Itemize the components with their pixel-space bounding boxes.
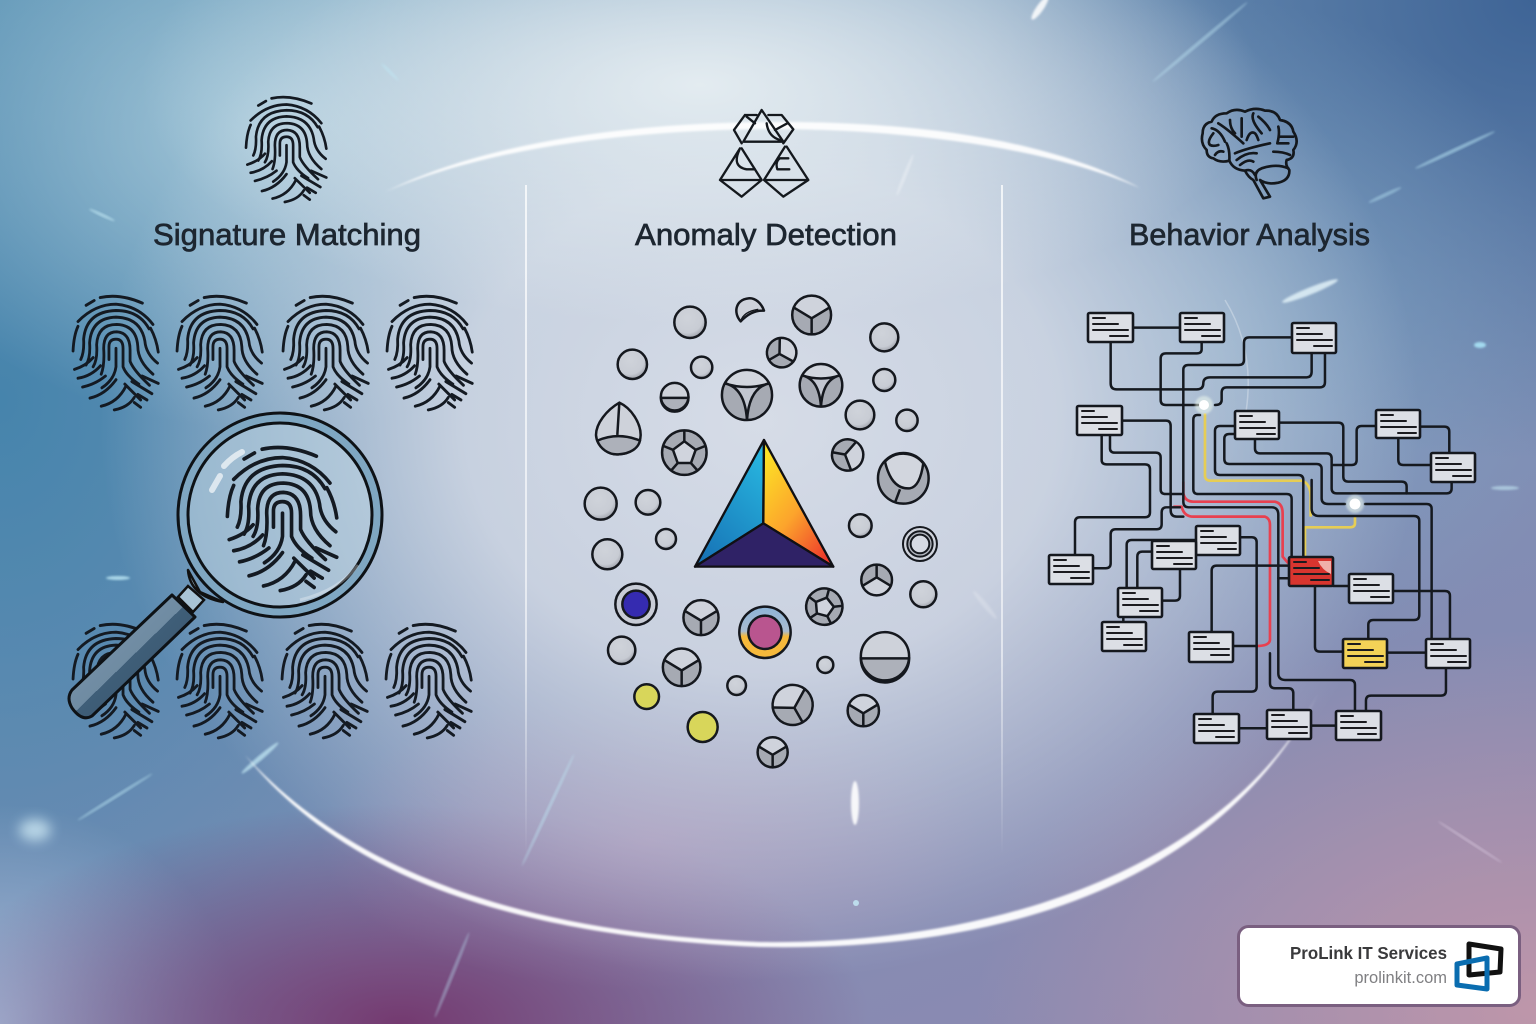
plain data points xyxy=(585,307,936,695)
yellow data points xyxy=(634,684,718,742)
central prism xyxy=(695,440,833,567)
panel: signature matching xyxy=(69,97,472,738)
icon: fingerprint xyxy=(246,97,326,202)
icon: triangles xyxy=(720,110,808,197)
column dividers xyxy=(525,185,1003,855)
heading: anomaly detection: Anomaly Detection xyxy=(635,217,897,252)
heading: signature matching: Signature Matching xyxy=(153,217,421,252)
flow network wires xyxy=(1075,328,1452,728)
panel: behavior analysis xyxy=(1049,109,1475,743)
flow network boxes xyxy=(1049,313,1475,743)
highlighted red path xyxy=(1173,482,1288,646)
data point cluster xyxy=(585,296,937,767)
icon: magnifying glass xyxy=(69,413,382,718)
brand name: ProLink IT Services xyxy=(1290,943,1447,963)
icon: brain xyxy=(1202,109,1297,198)
highlighted yellow path xyxy=(1205,413,1355,557)
cup data point xyxy=(878,453,929,504)
blue anomaly point xyxy=(615,584,657,625)
brand url: prolinkit.com xyxy=(1354,969,1447,987)
faceted data points xyxy=(596,296,929,767)
white signal nodes xyxy=(1195,396,1364,513)
logo card xyxy=(1238,926,1520,1006)
oval frame arc xyxy=(245,122,1325,947)
teardrop data point xyxy=(596,403,641,454)
panel: anomaly detection xyxy=(585,110,937,767)
black wires xyxy=(1075,328,1452,728)
heading: behavior analysis: Behavior Analysis xyxy=(1129,217,1370,252)
icon: logo xyxy=(1457,944,1501,989)
concentric ring point xyxy=(903,527,937,561)
magenta anomaly point xyxy=(739,607,791,658)
chip data point xyxy=(736,298,764,321)
fingerprint grid xyxy=(73,296,472,738)
